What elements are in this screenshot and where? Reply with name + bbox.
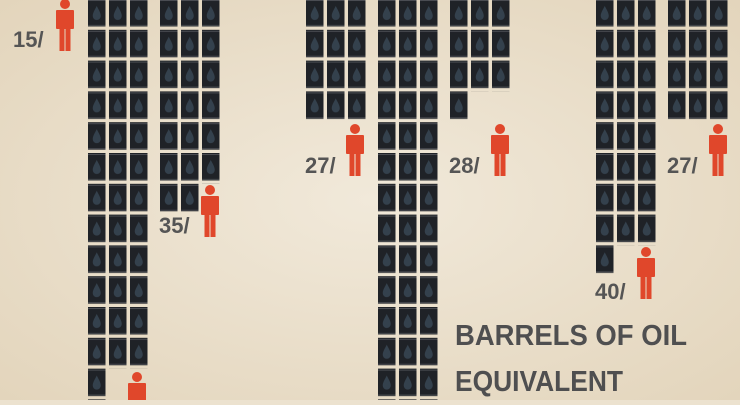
caption: EQUIVALENT xyxy=(455,366,623,398)
column F: 40 xyxy=(595,0,656,304)
label 40: 40/ xyxy=(595,279,626,304)
caption: BARRELS OF OIL xyxy=(455,320,687,352)
label 27: 27/ xyxy=(305,153,336,178)
icon: person F xyxy=(637,247,655,299)
column G: 27 xyxy=(667,0,728,178)
column E: 28 xyxy=(449,0,510,178)
column B: 35 xyxy=(159,0,220,238)
label 35: 35/ xyxy=(159,213,190,238)
icon: person A xyxy=(56,0,74,51)
label 27: 27/ xyxy=(667,153,698,178)
column C: 27 xyxy=(305,0,366,178)
icon: person B xyxy=(201,185,219,237)
label 15: 15/ xyxy=(13,27,44,52)
icon: person A bottom xyxy=(128,372,146,405)
column A: 15 xyxy=(13,0,148,405)
column D: full xyxy=(378,0,438,401)
label 28: 28/ xyxy=(449,153,480,178)
icon: person E xyxy=(491,124,509,176)
icon: person G xyxy=(709,124,727,176)
caption xyxy=(455,320,687,398)
icon: person C xyxy=(346,124,364,176)
